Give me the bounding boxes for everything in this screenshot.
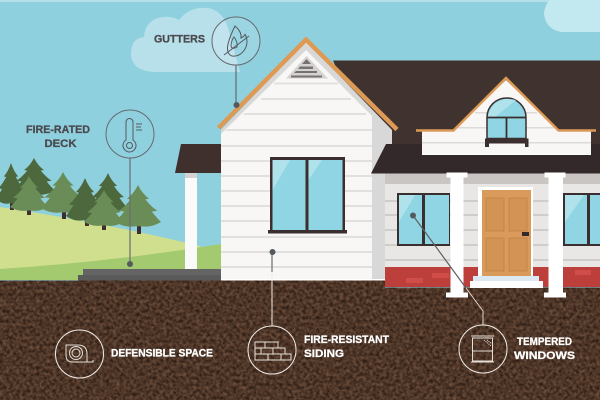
deck <box>78 269 223 280</box>
icon: crossed flame <box>224 26 249 56</box>
sky background <box>0 0 600 285</box>
main roof trim <box>218 40 397 130</box>
icon: thermometer <box>123 118 142 152</box>
callout: fire-resistant siding <box>248 249 389 374</box>
callout: defensible space <box>56 330 213 378</box>
icon: window <box>471 336 494 362</box>
callout: defensible space: DEFENSIBLE SPACE <box>111 348 213 360</box>
porch roof <box>371 144 600 174</box>
main gable house <box>218 40 397 281</box>
main window <box>268 157 347 234</box>
callout: tempered windows: TEMPERED <box>517 336 572 348</box>
hill: light <box>0 207 221 280</box>
porch left window <box>397 193 450 246</box>
side porch <box>175 144 222 269</box>
porch column right <box>544 172 566 298</box>
callout: fire-rated deck <box>26 110 154 267</box>
hill: dark <box>0 244 221 280</box>
porch right window <box>563 193 600 246</box>
gable vent <box>286 56 328 78</box>
callout: fire-resistant siding: FIRE-RESISTANT <box>304 334 389 346</box>
callout: fire-rated deck: DECK <box>44 138 77 150</box>
icon: bricks <box>255 342 291 360</box>
soil ground <box>0 280 600 400</box>
porch wall <box>385 173 600 287</box>
callout: fire-resistant siding: SIDING <box>304 348 344 360</box>
callout: fire-rated deck: FIRE-RATED <box>26 124 90 136</box>
dormer window <box>485 98 528 147</box>
upper roof <box>333 60 600 150</box>
cloud: right <box>544 0 600 32</box>
dormer <box>416 78 596 155</box>
callout: gutters <box>154 17 260 108</box>
callout: gutters: GUTTERS <box>154 34 205 46</box>
cloud: left <box>131 8 240 72</box>
door steps <box>470 276 543 288</box>
icon: tape measure <box>66 345 93 362</box>
callout: tempered windows: WINDOWS <box>514 350 575 362</box>
porch column left <box>446 172 468 298</box>
door <box>478 187 533 279</box>
callout: tempered windows <box>410 212 575 373</box>
trees <box>0 158 161 234</box>
